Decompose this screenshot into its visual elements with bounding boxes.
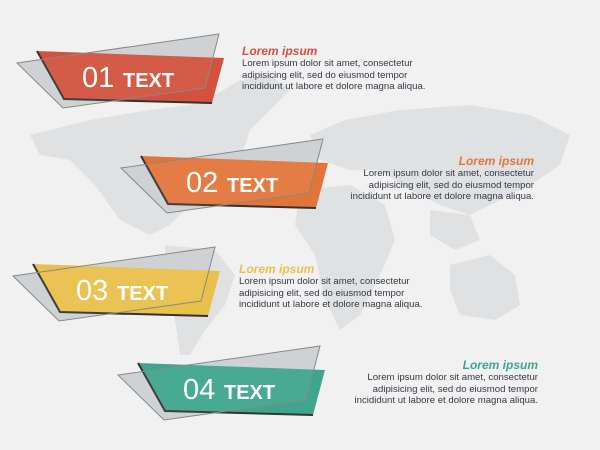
banner 03: TEXT [117,283,168,305]
text block 2: adipisicing elit, sed do eiusmod tempor [369,180,534,190]
banner 03 [13,247,220,321]
banner 04: 04 [183,374,215,406]
banner 02: TEXT [227,175,278,197]
text block 2: incididunt ut labore et dolore magna aliqua. [351,191,534,202]
banner 02: 02 [186,167,218,199]
text block 1: Lorem ipsum dolor sit amet, consectetur [242,58,413,69]
text block 3: Lorem ipsum [239,262,314,276]
text block 3 [239,262,422,310]
banner 03: 03 [76,275,108,307]
text block 1 [242,44,425,92]
text block 1: Lorem ipsum [242,44,317,58]
banner 04 [118,346,325,420]
text block 4: Lorem ipsum [463,358,538,372]
text block 3: Lorem ipsum dolor sit amet, consectetur [239,276,410,287]
text block 2 [351,154,534,202]
text block 4: incididunt ut labore et dolore magna aliqua. [355,395,538,406]
banner 01: 01 [82,62,114,94]
banner 01: TEXT [123,70,174,92]
text block 3: adipisicing elit, sed do eiusmod tempor [239,288,404,298]
text block 1: adipisicing elit, sed do eiusmod tempor [242,70,407,80]
banner 02 [121,139,328,213]
text block 2: Lorem ipsum dolor sit amet, consectetur [363,168,534,179]
text block 2: Lorem ipsum [459,154,534,168]
text block 1: incididunt ut labore et dolore magna aliqua. [242,81,425,92]
banner 04: TEXT [224,382,275,404]
text block 4: adipisicing elit, sed do eiusmod tempor [373,384,538,394]
text block 4 [355,358,538,406]
text block 4: Lorem ipsum dolor sit amet, consectetur [367,372,538,383]
text block 3: incididunt ut labore et dolore magna aliqua. [239,299,422,310]
banner 01 [17,34,224,108]
